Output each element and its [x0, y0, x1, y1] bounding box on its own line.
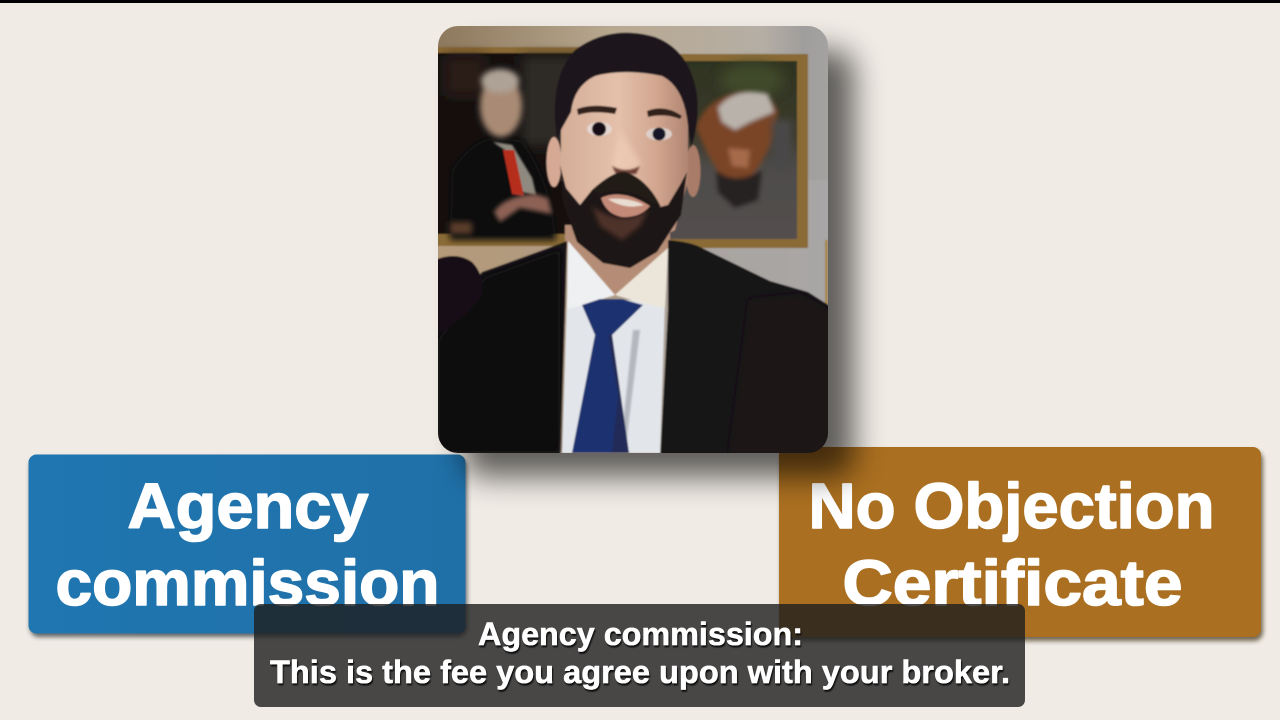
photo drop shadow [464, 50, 854, 477]
jacket [430, 240, 835, 460]
card: No Objection Certificate: No Objection [808, 470, 1214, 542]
caption line 2: This is the fee you agree upon with your broker. [270, 654, 1010, 690]
chin patch [592, 206, 648, 240]
tie [572, 299, 643, 453]
top black strip [0, 0, 1280, 3]
caption bar [254, 604, 1025, 707]
nose shadow [612, 166, 640, 174]
card: Agency commission: commission [56, 547, 440, 619]
bull [696, 91, 792, 208]
mouth [601, 194, 650, 217]
hair [555, 33, 698, 148]
shirt [562, 300, 665, 453]
ears [546, 137, 562, 187]
card: No Objection Certificate [779, 447, 1263, 641]
card: No Objection Certificate: Certificate [842, 547, 1182, 619]
left painting [438, 46, 580, 247]
moustache [624, 172, 662, 208]
card: Agency commission: Agency [128, 470, 369, 542]
eyebrows [577, 106, 617, 115]
neck [565, 225, 670, 297]
microphone [438, 255, 482, 334]
nose highlight [615, 138, 640, 169]
photo: presenter in suit in front of two paintings [430, 20, 854, 477]
face [560, 72, 690, 233]
card: Agency commission [28, 454, 467, 637]
caption line 1: Agency commission: [478, 616, 803, 652]
collar [567, 241, 615, 309]
right painting [670, 54, 808, 248]
eyes [587, 122, 672, 140]
beard [560, 165, 687, 268]
wall [430, 20, 835, 180]
right gold wall edge [825, 240, 828, 305]
